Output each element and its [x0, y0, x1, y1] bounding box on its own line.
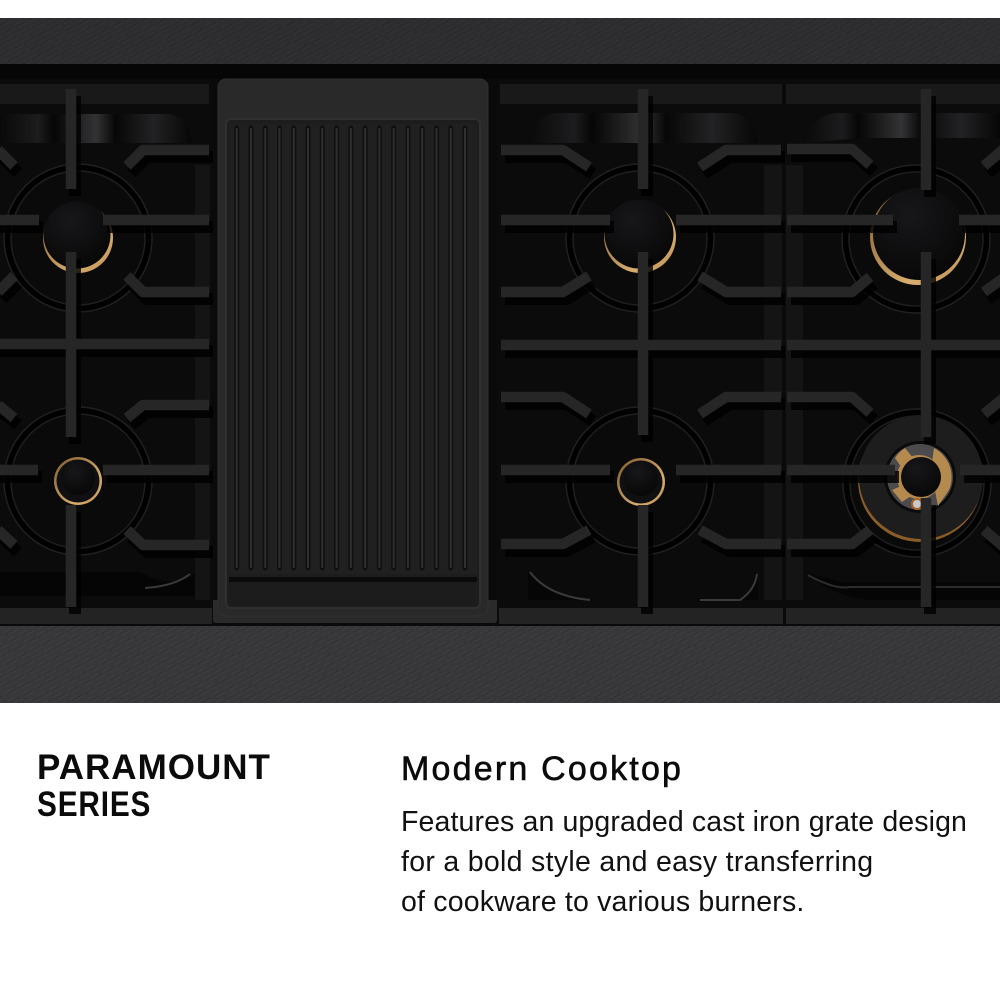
feature description: Features an upgraded cast iron grate design: [401, 806, 967, 838]
top and bottom reflective slots: [0, 113, 1000, 600]
cooktop base: [0, 79, 1000, 626]
griddle: [213, 79, 497, 623]
grates: [0, 89, 1000, 614]
front panel: [0, 626, 1000, 703]
series heading: [37, 748, 271, 824]
large front right burner: [858, 415, 983, 542]
back panel: [0, 18, 1000, 79]
feature description: for a bold style and easy transferring: [401, 846, 873, 878]
feature description: of cookware to various burners.: [401, 886, 804, 918]
series heading: PARAMOUNT: [37, 748, 271, 787]
burner caps: [43, 188, 966, 506]
burner bowls: [4, 164, 991, 557]
series heading: SERIES: [37, 785, 151, 824]
feature title: Modern Cooktop: [401, 750, 683, 788]
feature description: [401, 806, 967, 918]
